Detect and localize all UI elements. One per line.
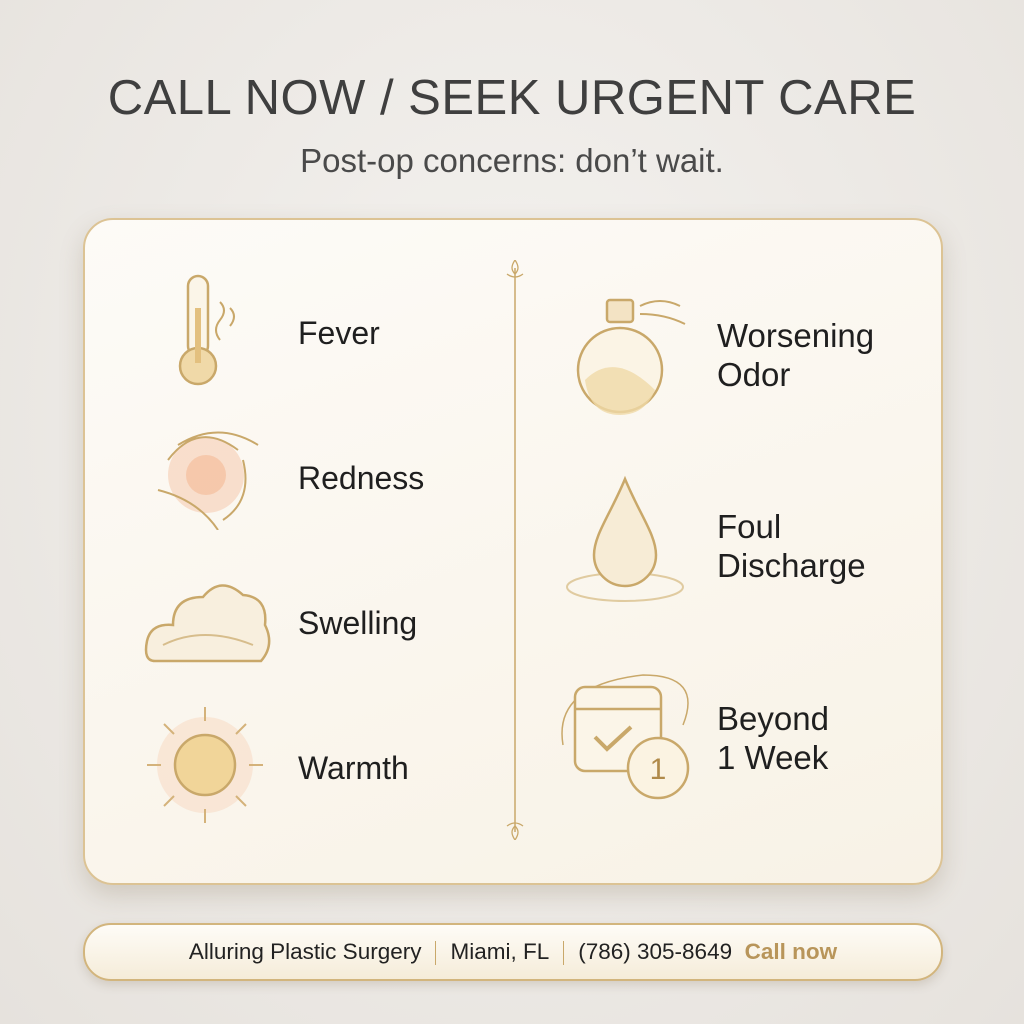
label: warmth: Warmth — [298, 750, 409, 786]
label: beyond 1 week: Beyond — [717, 700, 829, 737]
label: worsening odor: Odor — [717, 356, 790, 393]
subtitle: Post-op concerns: don’t wait. — [300, 142, 724, 179]
icon: sun — [147, 707, 263, 823]
icon: calendar clock — [561, 674, 690, 800]
footer bar — [83, 923, 943, 981]
icon: thermometer — [178, 274, 235, 386]
icon: perfume — [576, 298, 686, 415]
label: foul discharge: Discharge — [717, 547, 866, 584]
divider — [506, 260, 524, 840]
label: foul discharge: Foul — [717, 508, 781, 545]
icon: swelling cloud — [144, 584, 270, 662]
title: CALL NOW / SEEK URGENT CARE — [108, 71, 916, 125]
icon: calendar clock: 1 — [650, 753, 666, 786]
label: redness: Redness — [298, 460, 424, 496]
label: worsening odor — [717, 317, 874, 393]
label: fever: Fever — [298, 315, 380, 351]
panel: symptoms — [83, 218, 943, 885]
label: worsening odor: Worsening — [717, 317, 874, 354]
label: swelling: Swelling — [298, 605, 417, 641]
label: foul discharge — [717, 508, 866, 584]
icon: drop — [566, 476, 684, 602]
footer bar: Alluring Plastic Surgery Miami, FL (786) 305-8649 Call now — [189, 939, 837, 964]
icon: redness — [158, 432, 258, 530]
label: beyond 1 week: 1 Week — [717, 739, 828, 776]
label: beyond 1 week — [717, 700, 829, 776]
